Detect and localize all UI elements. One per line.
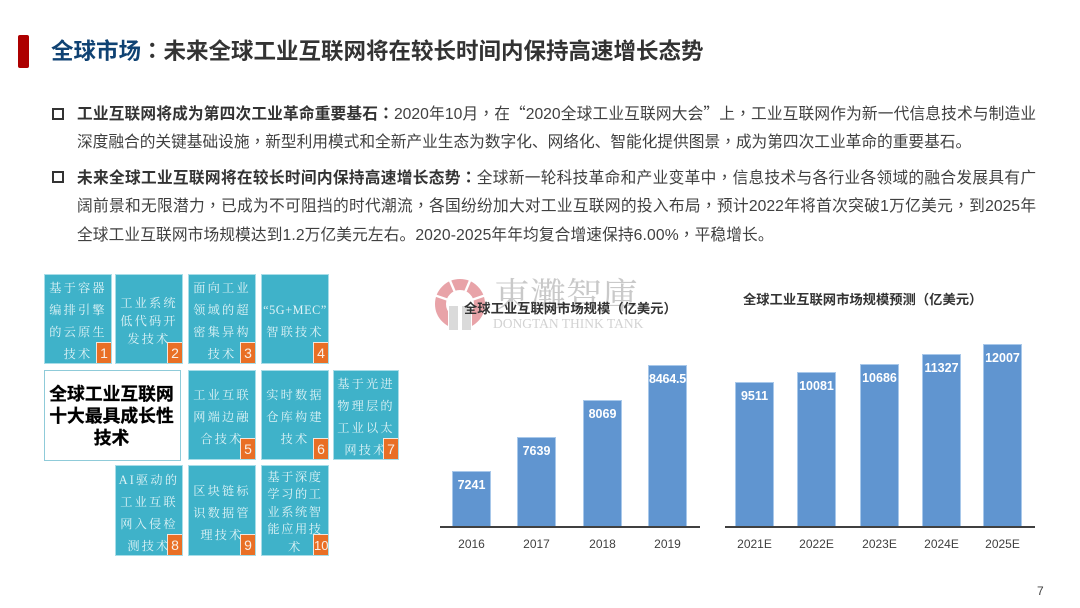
x label 2017: 2017 — [523, 537, 550, 551]
bar 2017: 7639 — [523, 444, 550, 458]
bullet 2 text — [77, 165, 1036, 245]
bar 2024E: 11327 — [924, 361, 959, 375]
tile 9: 9 — [244, 537, 252, 553]
tile 3: 3 — [244, 345, 252, 361]
bar 2017 — [517, 437, 556, 526]
tile 5: 5 — [244, 441, 252, 457]
tile 4 — [261, 274, 329, 364]
center heading box: 技术 — [94, 428, 129, 448]
tile 1 — [44, 274, 112, 364]
tile 8: AI驱动的 — [119, 472, 179, 486]
tile 8: 工业互联 — [120, 494, 178, 508]
tile 7: 网技术 — [344, 443, 388, 457]
tile 1: 基于容器 — [49, 281, 107, 295]
tile 7: 7 — [387, 441, 395, 457]
bullet 1 text — [77, 101, 1036, 152]
bar 2021E — [735, 382, 774, 526]
tile 10: 学习的工 — [267, 487, 323, 501]
tile 2 — [115, 274, 183, 364]
tile 9: 区块链标 — [193, 484, 251, 498]
chart title: market size: 全球工业互联网市场规模（亿美元） — [464, 301, 677, 316]
tile 2: 低代码开 — [120, 314, 178, 328]
tile 5 — [188, 370, 256, 460]
tile 3: 领域的超 — [193, 303, 251, 317]
bar 2024E — [922, 354, 961, 526]
chart: historical bars — [440, 365, 700, 551]
title accent bar — [18, 35, 29, 68]
bullet 1 icon — [52, 108, 64, 120]
bullet 2 icon — [52, 171, 64, 183]
tile 1: 技术 — [64, 347, 92, 361]
watermark logo — [435, 276, 644, 331]
chart title: forecast: 全球工业互联网市场规模预测（亿美元） — [743, 292, 982, 307]
tile 1: 的云原生 — [49, 325, 107, 339]
watermark english name: DONGTAN THINK TANK — [493, 316, 643, 331]
chart: forecast bars — [725, 344, 1035, 551]
tile 3: 面向工业 — [193, 281, 251, 295]
tile 5: 合技术 — [200, 432, 244, 446]
tile 6: 仓库构建 — [266, 410, 324, 424]
axis — [725, 526, 1035, 528]
tile 6: 实时数据 — [266, 388, 324, 402]
tile 8: 网入侵检 — [120, 516, 178, 530]
x label 2023E: 2023E — [862, 537, 897, 551]
panel: ten technologies — [44, 274, 399, 556]
watermark chinese name: 東灘智庫 — [494, 276, 638, 316]
bar 2023E — [860, 364, 899, 526]
bar 2018: 8069 — [589, 407, 616, 421]
tile 6: 技术 — [281, 432, 309, 446]
tile 3: 密集异构 — [193, 325, 251, 339]
tile 9: 理技术 — [200, 528, 244, 542]
tile 10: 基于深度 — [267, 470, 323, 484]
bullet 1 text: 深度融合的关键基础设施，新型利用模式和全新产业生态为数字化、网络化、智能化提供图景，成为第四次工业革命的重要基石。 — [77, 129, 971, 152]
tile 10: 术 — [288, 540, 302, 554]
tile 3: 技术 — [208, 347, 236, 361]
center heading box — [44, 370, 181, 461]
bar 2021E: 9511 — [741, 389, 768, 403]
x label 2018: 2018 — [589, 537, 616, 551]
tile 2: 工业系统 — [120, 296, 178, 310]
tile 2: 2 — [171, 345, 179, 361]
tile 1: 1 — [100, 345, 108, 361]
bullet 2 text: 未来全球工业互联网将在较长时间内保持高速增长态势：全球新一轮科技革命和产业变革中，信息技术与各行业各领域的融合发展具有广 — [77, 165, 1036, 188]
bar 2023E: 10686 — [862, 371, 897, 385]
tile 10: 业系统智 — [267, 505, 323, 519]
tile 7: 工业以太 — [337, 421, 395, 435]
bar 2019 — [648, 365, 687, 526]
center heading box: 十大最具成长性 — [49, 406, 174, 426]
bar 2025E: 12007 — [985, 351, 1020, 365]
bar 2018 — [583, 400, 622, 526]
tile 6 — [261, 370, 329, 460]
center heading box: 全球工业互联网 — [49, 384, 174, 404]
tile 4: “5G+MEC” — [263, 303, 327, 317]
bar 2016 — [452, 471, 491, 526]
x label 2022E: 2022E — [799, 537, 834, 551]
tile 9: 识数据管 — [193, 506, 251, 520]
tile 10 — [261, 465, 329, 556]
tile 10: 10 — [314, 538, 328, 553]
bar 2019: 8464.5 — [649, 372, 686, 386]
tile 3 — [188, 274, 256, 364]
bullet 2 text: 阔前景和无限潜力，已成为不可阻挡的时代潮流，各国纷纷加大对工业互联网的投入布局，预计2022年将首次突破1万亿美元，到2025年 — [77, 193, 1036, 216]
tile 4: 智联技术 — [266, 325, 324, 339]
icon: watermark emblem — [435, 279, 485, 330]
tile 8: 8 — [171, 537, 179, 553]
bullet 1 text: 工业互联网将成为第四次工业革命重要基石：2020年10月，在“2020全球工业互联网大会”上，工业互联网作为新一代信息技术与制造业 — [77, 101, 1036, 124]
axis — [440, 526, 700, 528]
tile 6: 6 — [317, 441, 325, 457]
title: 全球市场：未来全球工业互联网将在较长时间内保持高速增长态势 — [51, 34, 704, 66]
x label 2021E: 2021E — [737, 537, 772, 551]
tile 7: 物理层的 — [337, 399, 395, 413]
tile 1: 编排引擎 — [49, 303, 107, 317]
x label 2016: 2016 — [458, 537, 485, 551]
tile 10: 能应用技 — [267, 522, 323, 536]
x label 2024E: 2024E — [924, 537, 959, 551]
x label 2019: 2019 — [654, 537, 681, 551]
x label 2025E: 2025E — [985, 537, 1020, 551]
tile 7: 基于光进 — [337, 377, 395, 391]
tile 5: 工业互联 — [193, 388, 251, 402]
tile 8: 测技术 — [127, 538, 171, 552]
bar 2022E — [797, 372, 836, 526]
tile 7 — [333, 370, 399, 460]
tile 4: 4 — [317, 345, 325, 361]
bar 2022E: 10081 — [799, 379, 834, 393]
tile 5: 网端边融 — [193, 410, 251, 424]
tile 2: 发技术 — [127, 332, 171, 346]
tile 9 — [188, 465, 256, 556]
bar 2025E — [983, 344, 1022, 526]
bullet 2 text: 全球工业互联网市场规模达到1.2万亿美元左右。2020-2025年年均复合增速保持6.00%，平稳增长。 — [77, 222, 774, 245]
bar 2016: 7241 — [458, 478, 485, 492]
page number: 7 — [1037, 584, 1044, 598]
tile 8 — [115, 465, 183, 556]
